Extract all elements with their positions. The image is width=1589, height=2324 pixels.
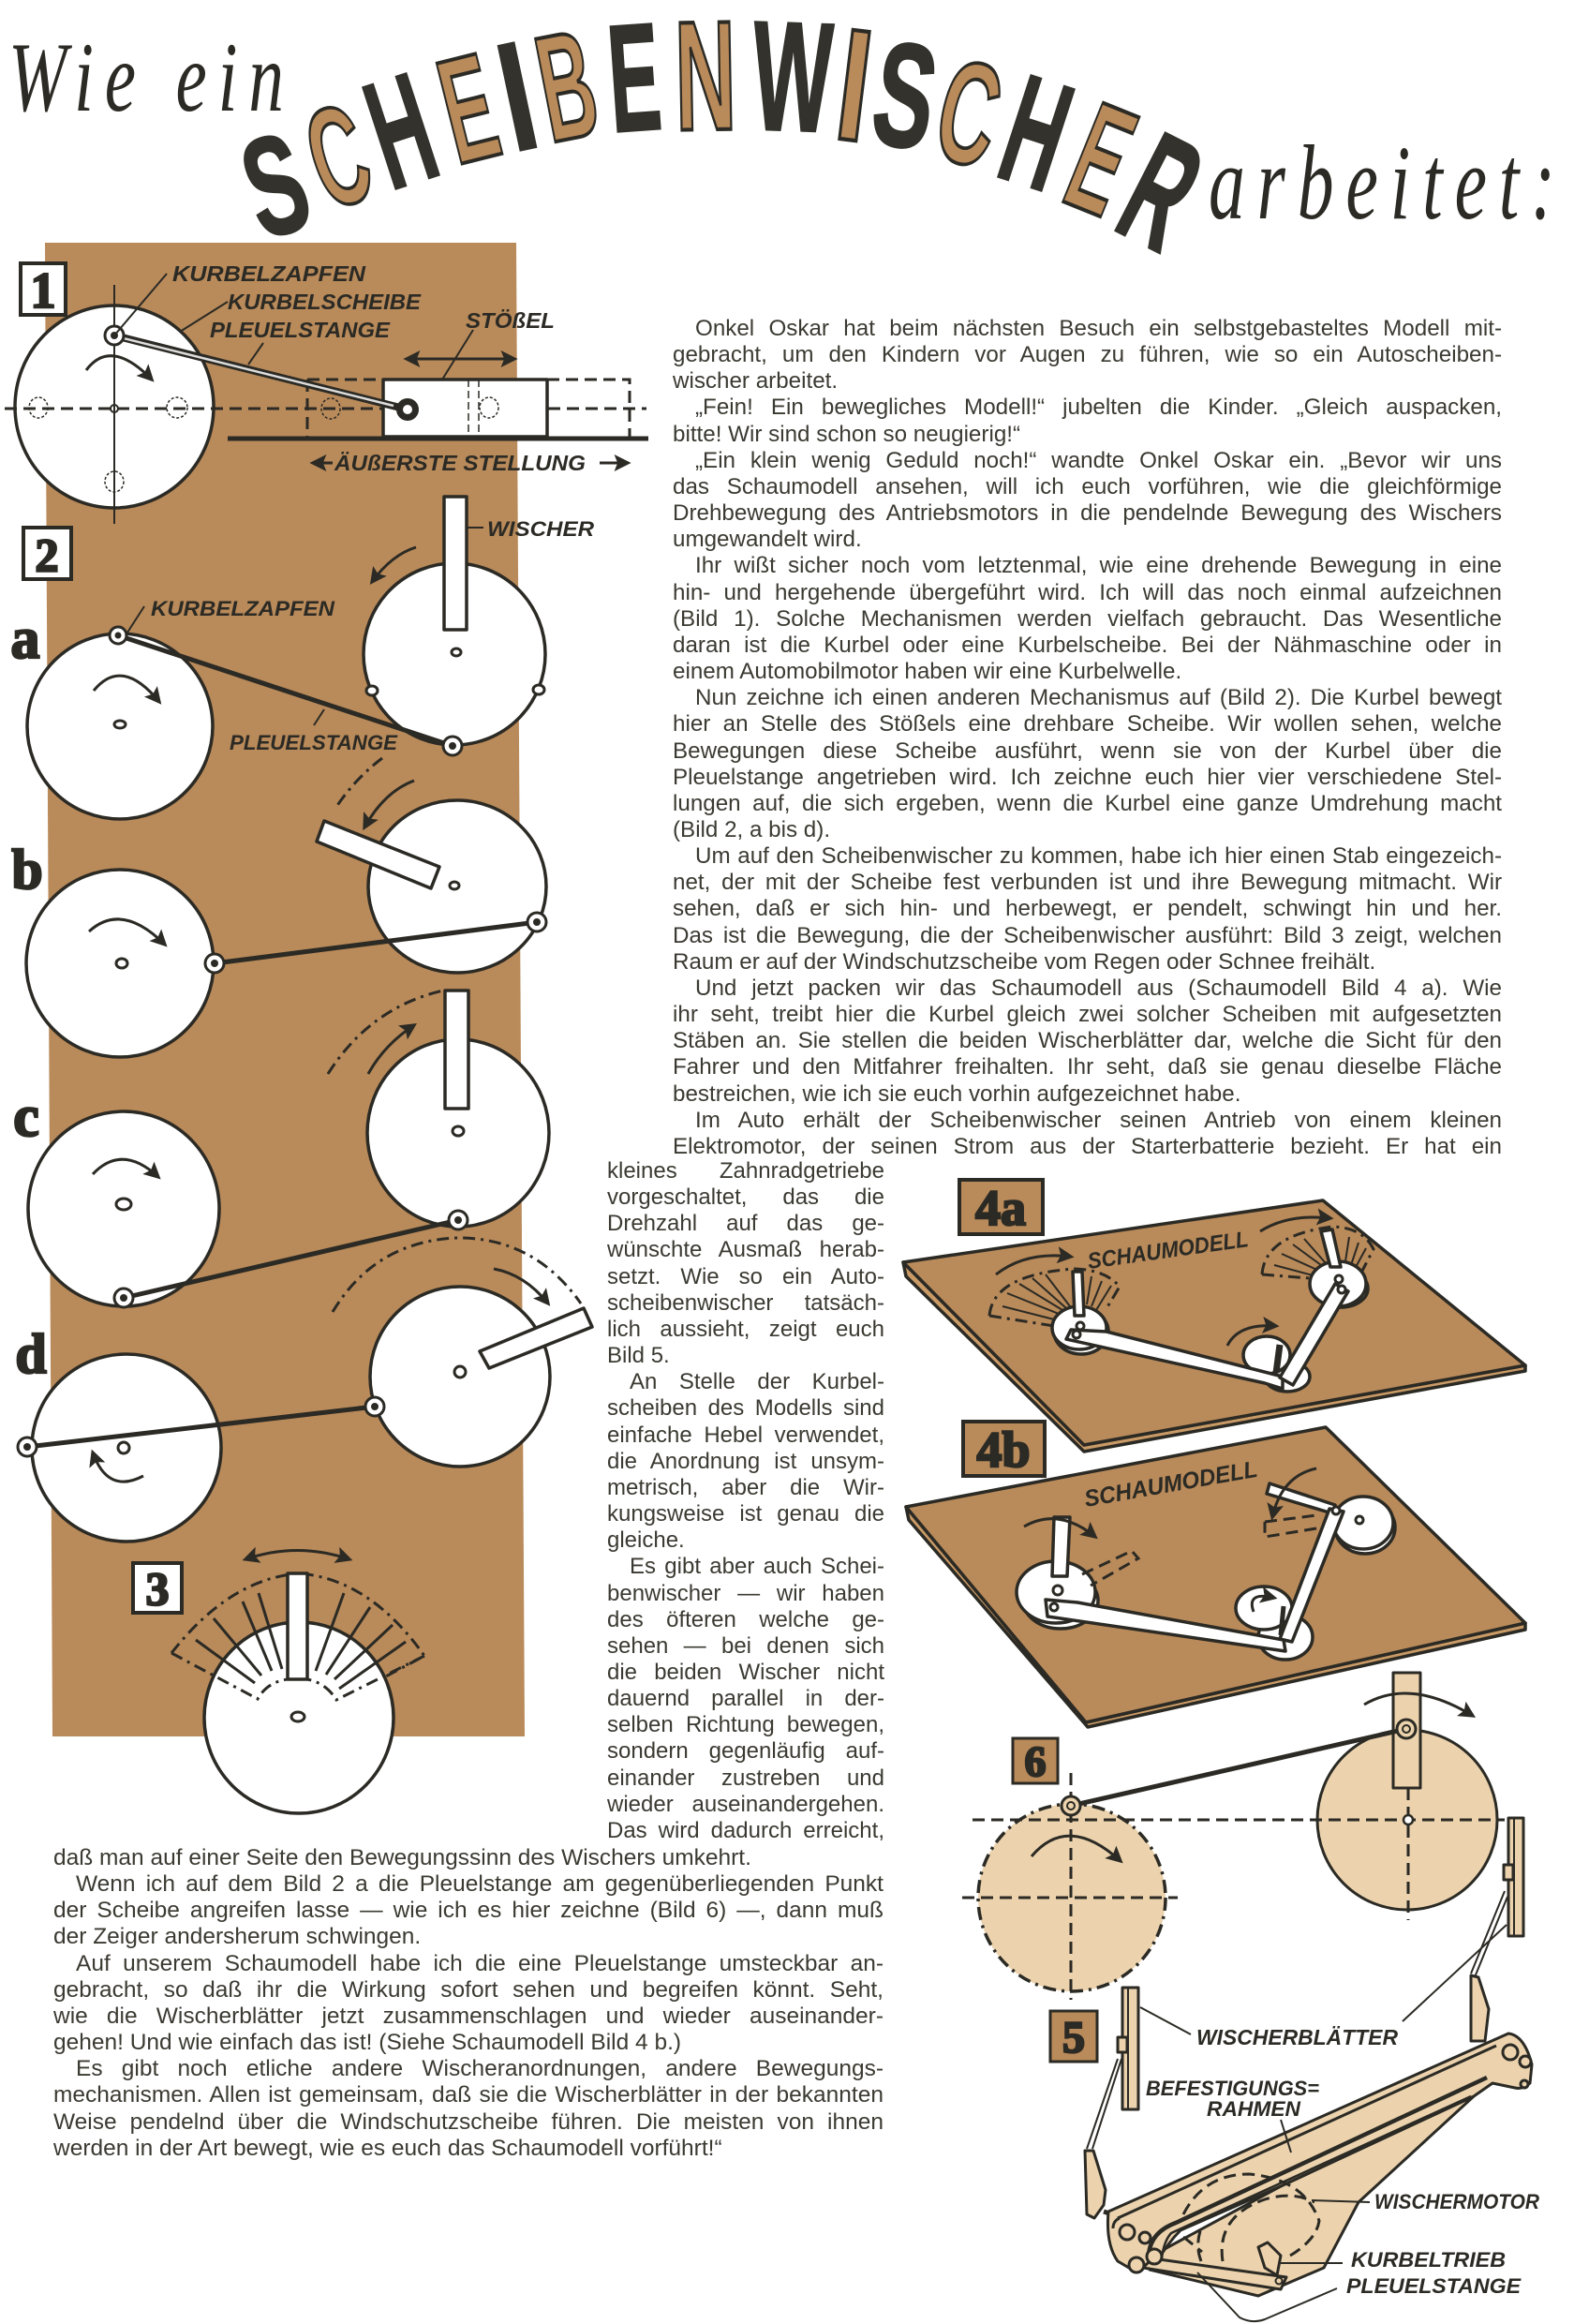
figure 5: real wiper mechanism: RAHMEN [1207,2097,1301,2121]
title: SCHEIBENWISCHER arched letters: R [1094,100,1226,285]
text block: upper right column: Elektromotor, der seinen Strom aus der Starterbatterie bezieht. Er hat ein [673,1134,1502,1159]
figure 4b: model reversed [906,1422,1525,1727]
sweep outline [171,1573,424,1700]
title: SCHEIBENWISCHER arched letters: H [347,39,454,222]
board [903,1262,1525,1452]
position b [11,758,546,1057]
figure 1: crank and slider: STÖßEL [466,308,555,333]
position a: a [11,607,39,671]
figure 5: real wiper mechanism: WISCHERMOTOR [1374,2190,1539,2213]
title: SCHEIBENWISCHER arched letters: B [524,0,610,175]
text block: narrow middle column: Bild 5. [607,1343,670,1368]
text block: upper right column: das Schaumodell ansehen, will ich euch vorführen, wie die gleichförmige [673,474,1502,499]
right fan [1262,1227,1374,1278]
position a [11,497,594,819]
title: SCHEIBENWISCHER arched letters: S [225,102,326,269]
text block: upper right column: hier an Stelle des Stößels eine drehbare Scheibe. Wir wollen sehen, welche [673,711,1502,737]
text block: upper right column: „Ein klein wenig Geduld noch!“ wandte Onkel Oskar ein. „Bevor wir uns [695,448,1502,473]
text block: narrow middle column: die Anordnung ist unsym- [607,1449,884,1474]
right disc [1317,1730,1497,1910]
labels: KURBELZAPFEN [172,261,365,286]
arrows [996,1256,1071,1274]
frame beam [1107,2034,1532,2271]
pins [1062,1720,1416,1825]
text block: narrow middle column: des öfteren welche ge- [607,1607,884,1632]
title: SCHEIBENWISCHER arched letters: E [1046,70,1155,249]
text block: narrow middle column: Drehzahl auf das ge- [607,1211,884,1236]
text block: narrow middle column: scheibenwischer tatsäch- [607,1290,884,1316]
text block: lower left column: werden in der Art bewegt, wie es euch das Schaumodell vorführt!“ [53,2136,722,2161]
text block: narrow middle column [607,1158,884,1843]
labels: WISCHERBLÄTTER [1196,2025,1398,2049]
text block: upper right column: Raum er auf der Windschutzscheibe vom Regen oder Schnee freihält. [673,949,1375,975]
text block: upper right column: Onkel Oskar hat beim nächsten Besuch ein selbstgebasteltes Modell mit- [695,316,1502,341]
text block: upper right column [673,316,1502,1159]
text block: narrow middle column: dauernd parallel in der- [607,1686,884,1711]
badge 5: 5 [1062,2013,1085,2063]
board [906,1507,1525,1727]
badge 1 [21,262,66,319]
figure 4a: model [903,1180,1525,1452]
text block: upper right column: bitte! Wir sind schon so neugierig!“ [673,422,1020,447]
text block: upper right column: bestreichen, wie ich sie euch vorhin aufgezeichnet habe. [673,1081,1240,1107]
crank pin [1258,2242,1281,2275]
text block: upper right column: umgewandelt wird. [673,527,862,552]
figure 1: crank and slider: KURBELSCHEIBE [228,290,422,314]
pivot [291,1712,304,1721]
leaders [1140,1925,1507,2321]
badge 4a: 4a [975,1180,1026,1236]
badge 6 [1013,1737,1058,1785]
text block: narrow middle column: kungsweise ist genau die [607,1501,884,1527]
right blade [1471,1818,1523,2041]
title: SCHEIBENWISCHER arched letters: C [289,74,388,240]
discs [1054,1309,1108,1354]
text block: narrow middle column: wünschte Ausmaß herab- [607,1237,884,1262]
leaders [114,274,473,380]
badge 2: 2 [36,529,58,581]
text block: lower left column: Auf unserem Schaumodell habe ich die eine Pleuelstange umsteckbar an- [76,1951,884,1976]
text block: lower left column: Wenn ich auf dem Bild 2 a die Pleuelstange am gegenüberliegenden Punkt [76,1871,884,1897]
crank rod [1143,2258,1286,2289]
text block: upper right column: hin- und hergehende übergeführt wird. Ich will das noch einmal aufzeichnen [673,580,1502,605]
text block: lower left column: gehen! Und wie einfach das ist! (Siehe Schaumodell Bild 4 b.) [53,2030,681,2055]
figure 2: four positions [11,497,594,1542]
text block: upper right column: Fahrer und den Mitfahrer freihalten. Ihr seht, daß sie genau dieselbe Fläche [673,1054,1502,1080]
text block: narrow middle column: gleiche. [607,1527,685,1553]
text block: upper right column: daran ist die Kurbel oder eine Kurbelscheibe. Bei der Nähmaschine oder in [673,633,1502,658]
badge 4b: 4b [976,1422,1031,1478]
text block: narrow middle column: die beiden Wischer nicht [607,1660,884,1685]
text block: upper right column: Nun zeichne ich einen anderen Mechanismus auf (Bild 2). Die Kurbel bewegt [695,685,1502,710]
connecting rod [105,326,419,421]
label: SCHAUMODELL [1082,1456,1259,1512]
text block: narrow middle column: scheiben des Modells sind [607,1395,884,1421]
title: arbeitet: arbeitet: [1209,125,1555,243]
figure 5: real wiper mechanism: PLEUELSTANGE [1346,2274,1522,2298]
motor dashed outline [1183,2174,1319,2261]
text block: narrow middle column: benwischer — wir haben [607,1580,884,1606]
badge 4b [963,1422,1045,1478]
text block: lower left column [53,1845,884,2161]
text block: lower left column: der Zeiger andersherum schwingen. [53,1924,421,1949]
text block: lower left column: mechanismen. Allen ist gemeinsam, daß sie die Wischerblätter in der bekannten [53,2082,884,2108]
figure 1: crank and slider: ÄUßERSTE STELLUNG [334,451,586,475]
disc [204,1622,394,1813]
text block: narrow middle column: vorgeschaltet, das die [607,1184,884,1210]
ghost pin positions [29,397,498,492]
left disc [978,1804,1166,1991]
text block: narrow middle column: selben Richtung bewegen, [607,1712,884,1737]
text block: lower left column: Weise pendelnd über die Windschutzscheibe führen. Die meisten von ihnen [53,2109,884,2135]
beam lines [1113,2046,1496,2228]
text block: upper right column: Bewegungen diese Scheibe ausführt, wenn sie von der Kurbel über die [673,738,1502,763]
text block: upper right column: einem Automobilmotor haben wir eine Kurbelwelle. [673,659,1181,684]
title: SCHEIBENWISCHER arched letters: E [423,21,512,196]
text block: upper right column: gebracht, um den Kindern vor Augen zu führen, wie so ein Autoscheiben- [673,342,1502,367]
figure 6: opposite motion [962,1673,1505,2000]
crank disc [15,305,214,508]
text block: narrow middle column: Es gibt aber auch Schei- [630,1554,884,1579]
figure 5: real wiper mechanism: BEFESTIGUNGS= [1146,2077,1319,2100]
text block: narrow middle column: wieder auseinandergehen. [607,1792,884,1817]
text block: narrow middle column: einfache Hebel verwendet, [607,1423,884,1448]
position a: WISCHER [487,517,594,541]
figure 1: crank and slider: PLEUELSTANGE [210,318,391,342]
bars [1046,1600,1285,1651]
text block: upper right column: Und jetzt packen wir das Schaumodell aus (Schaumodell Bild 4 a). Wie [695,976,1502,1001]
arrows [1364,1693,1473,1716]
title: SCHEIBENWISCHER arched letters: I [483,8,550,185]
title: SCHEIBENWISCHER arched letters [225,0,1226,285]
text block: narrow middle column: sehen — bei denen sich [607,1633,884,1659]
badge 2 [23,528,71,581]
title: SCHEIBENWISCHER arched letters: S [863,8,947,182]
text block: narrow middle column: metrisch, aber die Wir- [607,1475,884,1500]
figure 5: real wiper mechanism: KURBELTRIEB [1351,2248,1506,2272]
text block: upper right column: „Fein! Ein bewegliches Modell!“ jubelten die Kinder. „Gleich auspacken, [695,395,1502,420]
text block: lower left column: daß man auf einer Seite den Bewegungssinn des Wischers umkehrt. [53,1845,751,1870]
text block: narrow middle column: sondern gegenläufig auf- [607,1738,884,1764]
position c [13,991,549,1307]
position a: KURBELZAPFEN [151,597,335,620]
text block: narrow middle column: An Stelle der Kurbel- [630,1369,884,1394]
text block: upper right column: sehen, daß er sich hin- und herbewegt, er pendelt, schwingt hin und her. [673,896,1502,921]
text block: upper right column: Pleuelstange angetrieben wird. Ich zeichne euch hier vier verschiedene Stel- [673,765,1502,790]
title [8,0,1555,285]
left wiper [1073,1272,1084,1316]
left fan [989,1269,1120,1326]
text block: upper right column: net, der mit der Scheibe fest verbunden ist und ihre Bewegung mitmacht. Wir [673,870,1502,895]
text block: upper right column: Um auf den Scheibenwischer zu kommen, habe ich hier einen Stab eingezeich- [695,843,1502,869]
sweep positions [196,1593,406,1689]
figure 3: swept area [133,1550,424,1813]
text block: upper right column: ihr seht, treibt hier die Kurbel gleich zwei solcher Scheiben mit aufgesetzten [673,1002,1502,1027]
text block: lower left column: der Scheibe angreifen lasse — wie ich es hier zeichne (Bild 6) —, dann muß [53,1898,884,1923]
text block: narrow middle column: lich aussieht, zeigt euch [607,1317,884,1342]
title: Wie ein: Wie ein [8,22,284,132]
text block: narrow middle column: einander zustreben und [607,1765,884,1791]
arrow: left limit [313,461,333,465]
wiper [288,1573,307,1679]
end fittings [1120,2045,1531,2272]
badge 5 [1050,2011,1097,2063]
text block: narrow middle column: setzt. Wie so ein Auto- [607,1264,884,1289]
text block: upper right column: Ihr wißt sicher noch vom letztenmal, wie eine drehende Bewegung in eine [695,553,1502,578]
figure 5: real wiper mechanism [1050,1818,1539,2321]
position d: d [15,1323,47,1385]
text block: lower left column: wie die Wischerblätter jetzt zusammenschlagen und wieder auseinander- [53,2004,884,2029]
text block: upper right column: Das ist die Bewegung, die der Scheibenwischer ausführt: Bild 3 zeigt, welchen [673,923,1502,948]
arrows [1024,1519,1095,1537]
text block: upper right column: lungen auf, die sich ergeben, wenn die Kurbel eine ganze Umdrehung macht [673,791,1502,816]
slider [228,380,648,439]
connecting bars [1066,1330,1283,1389]
text block: upper right column: Im Auto erhält der Scheibenwischer seinen Antrieb von einem kleinen [695,1108,1502,1133]
figure 1: crank and slider [5,261,648,524]
text block: upper right column: Drehbewegung des Antriebsmotors in die pendelnde Bewegung des Wischers [673,500,1502,526]
text block: narrow middle column: Das wird dadurch erreicht, [607,1818,884,1843]
rotation arrow [86,356,152,380]
swing arrow [245,1550,349,1559]
stroke arrow [407,358,514,360]
panel: brown background [45,243,525,1736]
right disc [1335,1501,1395,1554]
title: SCHEIBENWISCHER arched letters: H [983,41,1091,224]
title: SCHEIBENWISCHER arched letters: C [923,29,1015,199]
label: SCHAUMODELL [1086,1227,1250,1274]
text block: upper right column: (Bild 2, a bis d). [673,817,830,842]
badge 1: 1 [30,262,56,319]
wiper [1393,1673,1420,1788]
text block: narrow middle column: kleines Zahnradgetriebe [607,1158,884,1184]
text block: lower left column: gebracht, so daß ihr die Wirkung sofort sehen und begreifen könnt. Seht, [53,1977,884,2003]
badge 4a [959,1180,1043,1236]
centre lines [962,1773,1505,2000]
arrow: right limit [600,461,628,465]
position a: PLEUELSTANGE [230,731,398,754]
crank discs [1258,1615,1313,1660]
badge 6: 6 [1025,1737,1046,1785]
position d [15,1238,592,1542]
position c: c [13,1085,39,1149]
text block: upper right column: (Bild 1). Solche Mechanismen werden vielfach gebraucht. Das Wesentliche [673,606,1502,632]
mount body [1150,2096,1474,2296]
text block: upper right column: Stäben an. Sie stellen die beiden Wischerblätter dar, welche die Sicht für den [673,1028,1502,1053]
badge 3 [133,1562,182,1615]
left blade [1085,1988,1138,2218]
badge 3: 3 [146,1562,169,1615]
text block: upper right column: wischer arbeitet. [673,368,838,394]
position b: b [11,839,43,901]
left disc [1023,1572,1098,1629]
text block: lower left column: Es gibt noch etliche andere Wischeranordnungen, andere Bewegungs- [76,2056,884,2081]
title: SCHEIBENWISCHER arched letters: I [827,0,882,175]
rod [1071,1729,1406,1806]
